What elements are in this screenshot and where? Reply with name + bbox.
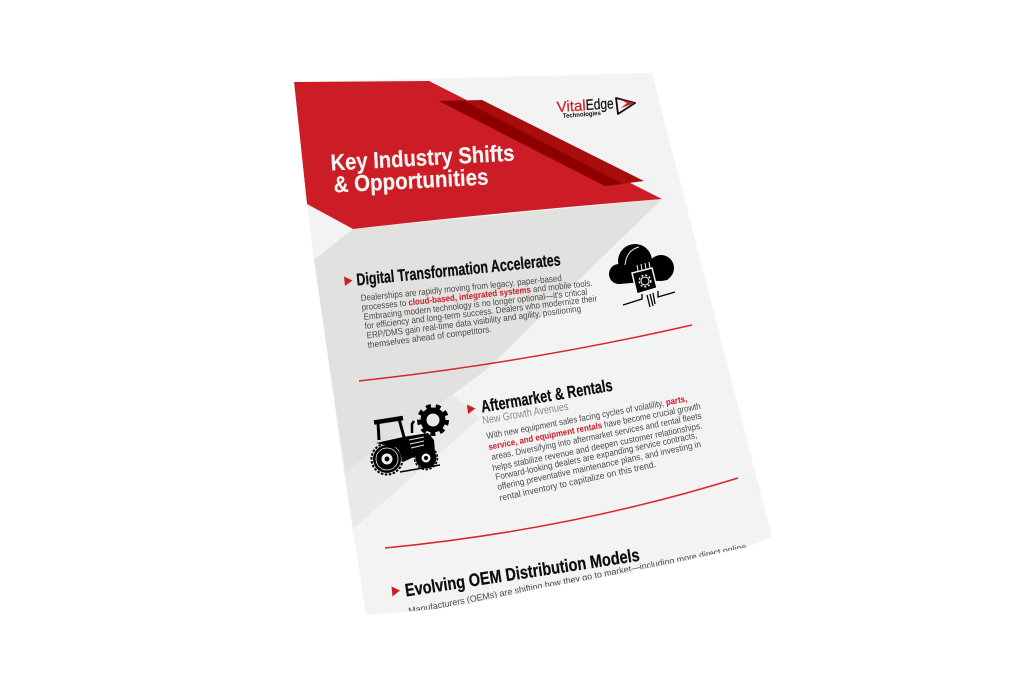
section 1: digital transformation [344,250,598,350]
body text 1: Embracing modern technology is no longer optional—it's critical [363,287,588,322]
logo: VitalEdge Technologies: Technologies [563,110,601,120]
header red banner [294,81,662,229]
background band: light grey [344,392,480,529]
body text 1: processes to cloud-based, integrated systems and mobile tools. [361,278,593,312]
heading 2: Aftermarket & Rentals [480,376,614,416]
section 2: aftermarket and rentals [467,376,703,503]
title: Key Industry Shifts [330,140,515,175]
body text 2: With new equipment sales facing cycles of volatility, parts, [486,394,688,441]
logo: VitalEdge Technologies [556,97,636,118]
bullet arrow 1 [344,276,352,286]
body text 1: Dealerships are rapidly moving from legacy, paper-based [360,273,562,303]
brochure page [294,73,772,615]
background band: dark grey [314,199,662,472]
title: & Opportunities [333,163,489,197]
body text 2: Forward-looking dealers are expanding service contracts, [494,430,698,482]
logo: VitalEdge Technologies: Vital [556,97,586,116]
subheading 2: New Growth Avenues [482,401,570,427]
body text 2: helps stabilize revenue and deepen customer relationships. [491,420,703,473]
heading 3: Evolving OEM Distribution Models [404,545,641,600]
heading 1: Digital Transformation Accelerates [356,250,561,289]
divider 1 [359,325,692,381]
body text 1: for efficiency and long-term success. Dealers who modernize their [364,293,598,331]
body text 2: offering preventative maintenance plans, and investing in [496,439,702,492]
logo: VitalEdge Technologies: Edge [585,95,614,114]
body text 1 [360,273,598,350]
body text 1: ERP/DMS gain real-time data visibility and agility, positioning [366,303,582,340]
body text 2 [486,394,703,503]
bullet arrow 3 [392,586,400,596]
section 3: OEM distribution [392,545,746,612]
body text 2: service, and equipment rentals have become crucial growth [487,401,701,452]
title [331,144,514,196]
body text 1: themselves ahead of competitors. [367,324,492,350]
divider 2 [385,478,738,548]
body text 2: rental inventory to capitalize on this trend. [498,459,657,503]
body text 2: areas. Diversifying into aftermarket services and rental fleets [490,411,703,462]
icon: tractor with gear [372,406,447,474]
bullet arrow 2 [467,404,476,414]
icon: cloud with chip [609,244,675,307]
header dark ribbon [439,100,644,186]
body text 3: Manufacturers (OEMs) are shifting how they go to market—including more direct online [408,542,747,616]
